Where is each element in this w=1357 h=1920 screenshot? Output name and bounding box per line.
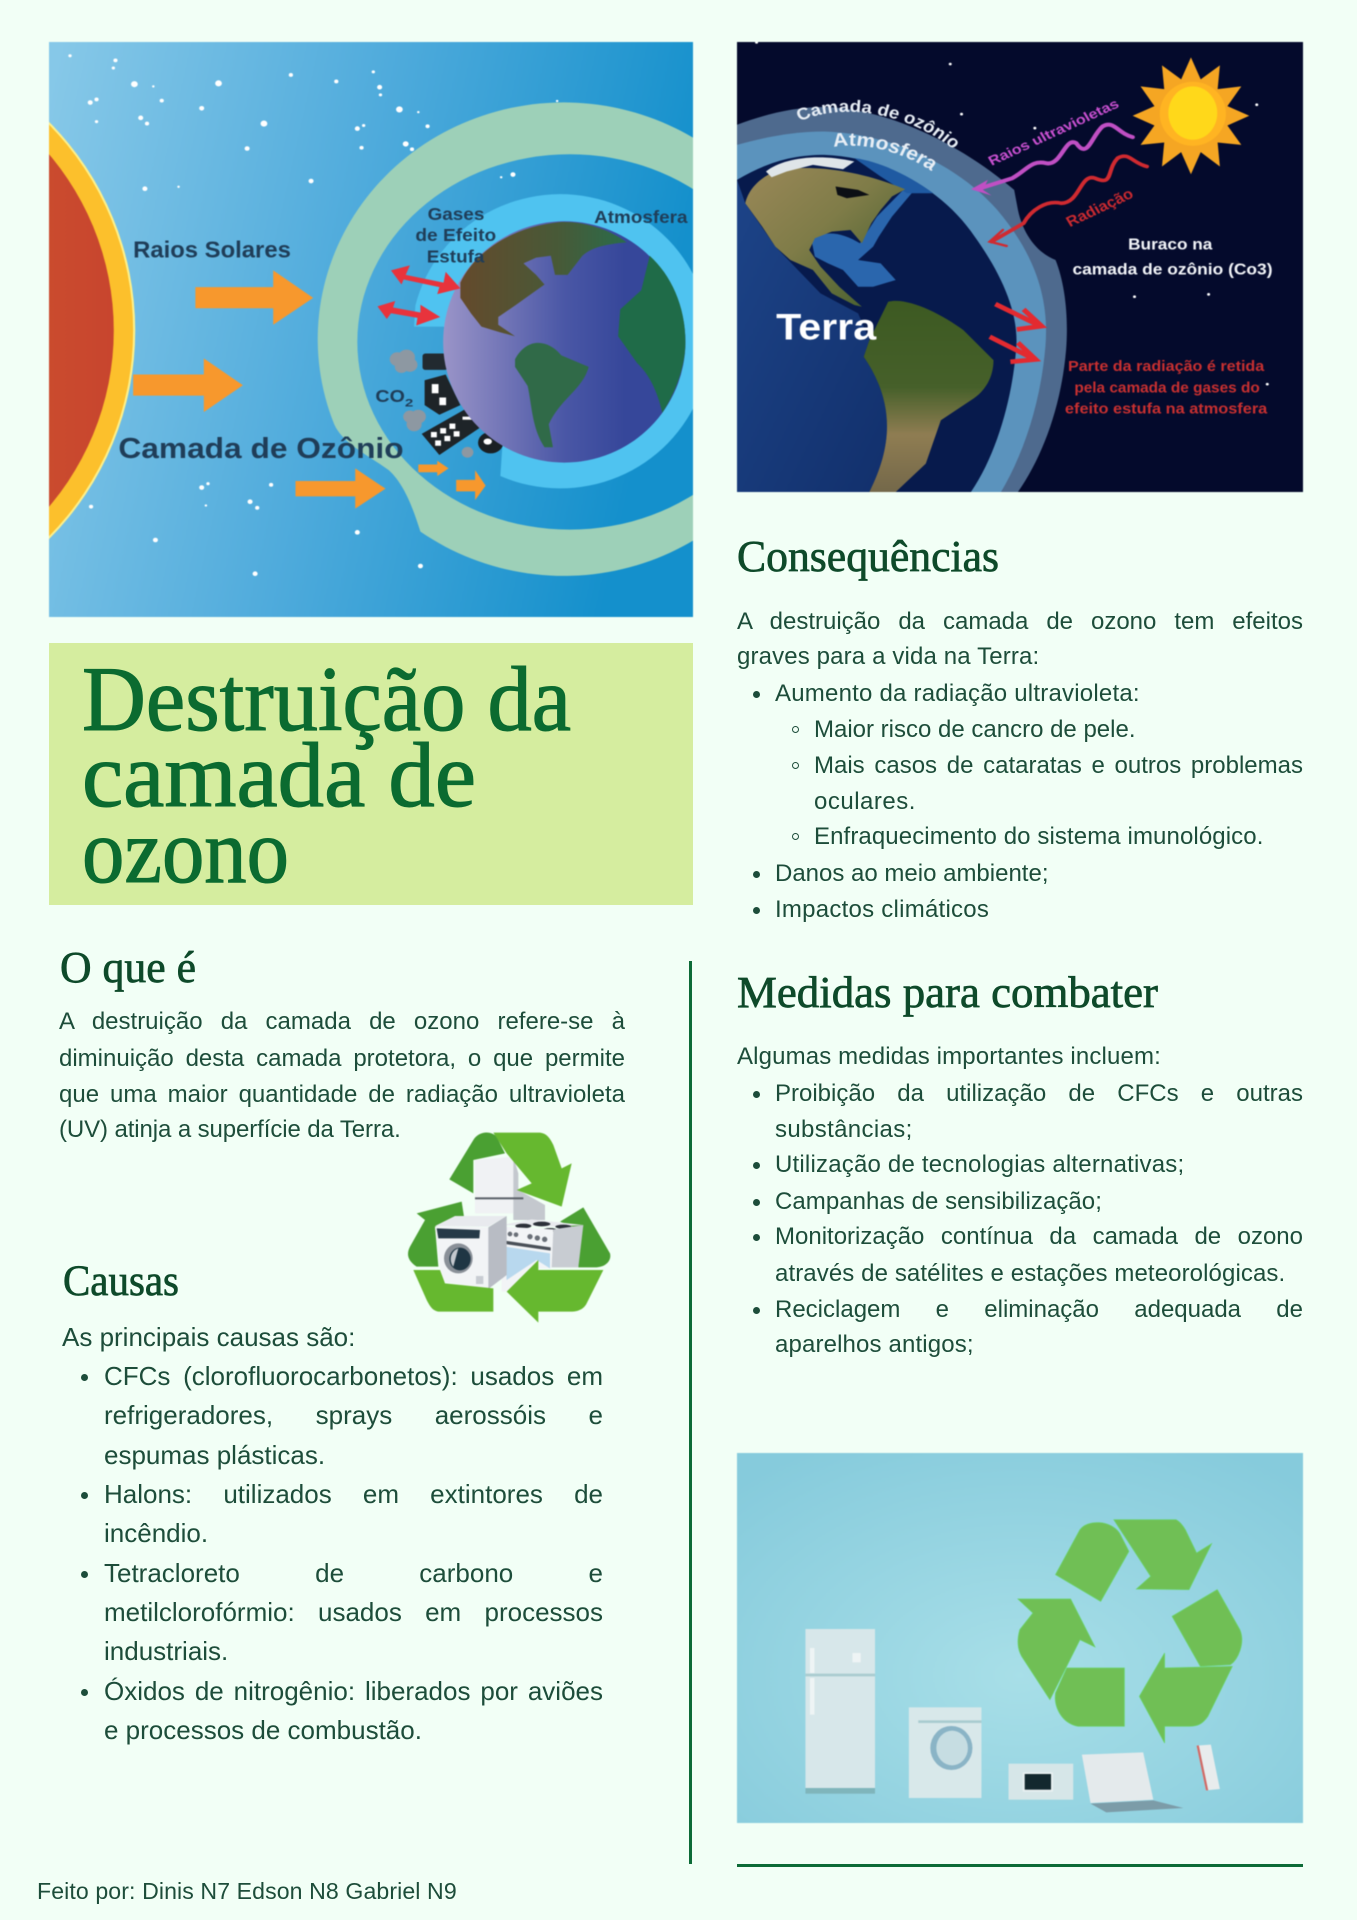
text: O que é paragraph: que uma maior quantidade de radiação ultravioleta bbox=[59, 1081, 625, 1108]
pollution: clouds, factory and buildings bbox=[390, 350, 503, 458]
text: causas list: As principais causas são: bbox=[62, 1322, 355, 1352]
atmosphere band bbox=[737, 131, 1046, 492]
text: consequências list: Impactos climáticos bbox=[775, 896, 989, 923]
heading: O que é: O que é bbox=[60, 943, 196, 992]
text: medidas list: Proibição da utilização de CFCs e outras bbox=[775, 1080, 1303, 1107]
phone bbox=[1197, 1745, 1220, 1790]
text: causas list: espumas plásticas. bbox=[104, 1440, 325, 1470]
oven bbox=[502, 1219, 583, 1292]
image labels: Raios ultravioletas bbox=[986, 96, 1122, 169]
text: consequências list: Aumento da radiação ultravioleta: bbox=[775, 680, 1140, 707]
image labels: Buraco na bbox=[1128, 235, 1213, 253]
image: Earth with ozone layer and radiation bbox=[736, 41, 1304, 493]
title text: camada de bbox=[82, 724, 476, 826]
footer credits: Feito por: Dinis N7 Edson N8 Gabriel N9 bbox=[37, 1878, 457, 1904]
text: medidas list: através de satélites e estações meteorológicas. bbox=[775, 1260, 1285, 1287]
icon: recycling symbol with appliances bbox=[407, 1132, 612, 1323]
text: medidas list: Algumas medidas importantes incluem: bbox=[737, 1043, 1161, 1070]
heading: Causas: Causas bbox=[63, 1258, 179, 1305]
solar ray arrows bbox=[133, 270, 486, 509]
image: appliances and recycling symbol bbox=[736, 1452, 1304, 1824]
ultraviolet ray wave bbox=[971, 125, 1133, 196]
image labels: Radiação bbox=[1063, 186, 1137, 231]
image labels: Parte da radiação é retida bbox=[1068, 359, 1265, 375]
text: medidas list bbox=[737, 1043, 1303, 1358]
text: O que é paragraph bbox=[59, 1008, 625, 1143]
image labels: Atmosfera bbox=[834, 132, 936, 172]
text: O que é paragraph: (UV) atinja a superfície da Terra. bbox=[59, 1116, 401, 1143]
text: consequências list: Mais casos de cataratas e outros problemas bbox=[814, 752, 1303, 779]
text: consequências list: Danos ao meio ambiente; bbox=[775, 860, 1048, 887]
stars bbox=[755, 41, 1269, 386]
title text bbox=[82, 648, 571, 902]
diagram labels: Estufa bbox=[427, 246, 485, 266]
text: consequências list: A destruição da camada de ozono tem efeitos bbox=[737, 608, 1303, 635]
fridge bbox=[475, 1157, 545, 1220]
image labels: camada de ozônio (Co3) bbox=[1072, 260, 1273, 278]
text: causas list: Tetracloreto de carbono e bbox=[104, 1558, 603, 1588]
text: O que é paragraph: A destruição da camada de ozono refere-se à bbox=[59, 1008, 625, 1035]
sun bbox=[1133, 57, 1249, 174]
text: consequências list: Enfraquecimento do sistema imunológico. bbox=[814, 823, 1263, 850]
text: consequências list: Maior risco de cancro de pele. bbox=[814, 716, 1136, 743]
text: causas list: refrigeradores, sprays aerossóis e bbox=[104, 1400, 603, 1430]
microwave bbox=[1009, 1764, 1073, 1800]
text: medidas list: aparelhos antigos; bbox=[775, 1331, 974, 1358]
title panel bbox=[49, 643, 693, 905]
radiation ray wave bbox=[990, 156, 1147, 246]
text: causas list: incêndio. bbox=[104, 1518, 208, 1548]
diagram labels: Gases bbox=[428, 204, 484, 224]
text: medidas list: Monitorização contínua da camada de ozono bbox=[775, 1223, 1303, 1250]
text: medidas list: Utilização de tecnologias alternativas; bbox=[775, 1151, 1184, 1178]
image labels: Camada de ozônio bbox=[796, 99, 958, 148]
recycling arrows bbox=[1018, 1520, 1242, 1743]
title text: ozono bbox=[82, 800, 289, 902]
washing machine bbox=[435, 1216, 507, 1289]
diagram labels bbox=[118, 204, 688, 465]
diagram labels: CO bbox=[375, 386, 405, 406]
text: causas list: Óxidos de nitrogênio: liberados por aviões bbox=[104, 1676, 603, 1706]
text: causas list: Halons: utilizados em extintores de bbox=[104, 1479, 603, 1509]
text: medidas list: Reciclagem e eliminação adequada de bbox=[775, 1296, 1303, 1323]
washing machine bbox=[909, 1707, 981, 1798]
text: medidas list: substâncias; bbox=[775, 1116, 913, 1143]
retained radiation arrows bbox=[990, 304, 1042, 362]
text: medidas list: Campanhas de sensibilização; bbox=[775, 1188, 1102, 1215]
heading: Consequências: Consequências bbox=[737, 532, 999, 581]
vertical divider bbox=[689, 961, 692, 1864]
atmosphere ring bbox=[414, 194, 710, 488]
diagram labels: de Efeito bbox=[415, 225, 496, 245]
Earth globe bbox=[443, 221, 685, 463]
image labels: Terra bbox=[776, 307, 877, 348]
image labels bbox=[760, 96, 1273, 417]
title text: Destruição da bbox=[82, 648, 571, 750]
text: consequências list: graves para a vida na Terra: bbox=[737, 643, 1039, 670]
ozone layer ring bbox=[318, 102, 810, 576]
laptop bbox=[1082, 1752, 1183, 1812]
text: consequências list: oculares. bbox=[814, 788, 916, 815]
text: O que é paragraph: diminuição desta camada protetora, o que permite bbox=[59, 1045, 625, 1072]
diagram labels: Atmosfera bbox=[594, 207, 688, 227]
text: consequências list bbox=[737, 608, 1303, 923]
ozone layer band bbox=[737, 107, 1067, 492]
horizontal divider bbox=[737, 1864, 1303, 1867]
Earth bbox=[737, 155, 1017, 492]
text: causas list: e processos de combustão. bbox=[104, 1715, 422, 1745]
text: causas list: metilclorofórmio: usados em processos bbox=[104, 1597, 603, 1627]
diagram labels: 2 bbox=[405, 398, 413, 410]
fridge bbox=[805, 1629, 875, 1794]
text: causas list: industriais. bbox=[104, 1636, 228, 1666]
greenhouse reflected arrows bbox=[378, 265, 460, 325]
heading: Medidas para combater: Medidas para combater bbox=[737, 968, 1158, 1017]
diagram labels: Raios Solares bbox=[133, 238, 291, 263]
diagram labels: Camada de Ozônio bbox=[118, 433, 404, 465]
sun bbox=[0, 36, 135, 625]
text: causas list: CFCs (clorofluorocarbonetos): usados em bbox=[104, 1361, 603, 1391]
text: causas list bbox=[62, 1322, 603, 1745]
image labels: efeito estufa na atmosfera bbox=[1065, 401, 1268, 417]
image: sun rays, ozone layer and Earth diagram bbox=[48, 41, 694, 618]
image labels: pela camada de gases do bbox=[1074, 380, 1260, 396]
